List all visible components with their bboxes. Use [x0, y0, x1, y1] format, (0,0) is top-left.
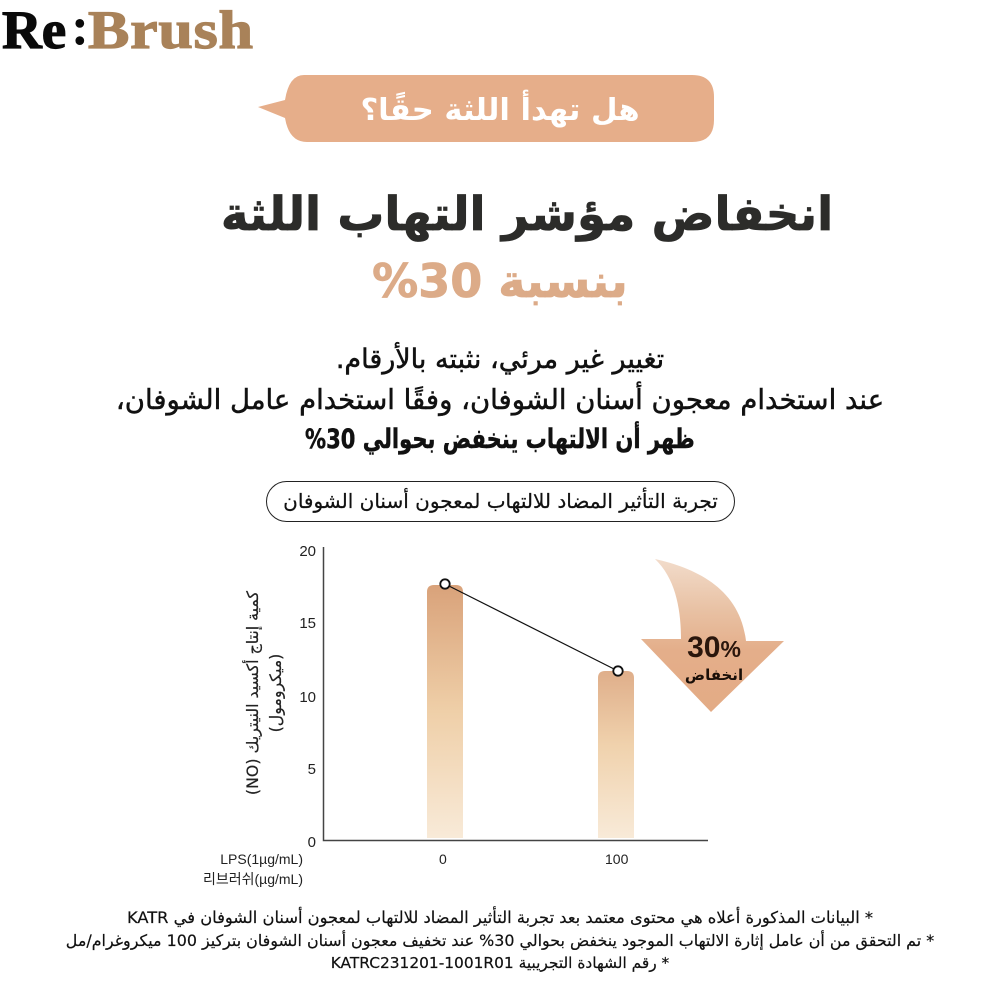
- footnotes: [66, 906, 934, 972]
- down arrow callout: 30%: [687, 631, 741, 664]
- logo: Brush: [88, 0, 254, 60]
- x axis labels: 0: [439, 851, 447, 867]
- body text: ظهر أن الالتهاب ينخفض بحوالي 30%: [305, 424, 695, 455]
- highlighted title: بنسبة 30%: [372, 254, 628, 308]
- y axis ticks: 0: [308, 834, 316, 851]
- footnotes: * رقم الشهادة التجريبية KATRC231201-1001R01: [331, 954, 669, 972]
- y axis ticks: 15: [299, 615, 316, 632]
- y axis title: [242, 590, 285, 795]
- y axis title: (ميكرومول): [266, 654, 285, 732]
- body text: تغيير غير مرئي، نثبته بالأرقام.: [336, 344, 664, 375]
- speech bubble heading: هل تهدأ اللثة حقًا؟: [360, 93, 640, 128]
- y axis ticks: 5: [308, 761, 316, 778]
- y axis ticks: 10: [299, 689, 316, 706]
- y axis title: كمية إنتاج أكسيد النيتريك (NO): [243, 591, 262, 795]
- logo: [2, 0, 254, 60]
- y axis ticks: [299, 543, 316, 851]
- main title: انخفاض مؤشر التهاب اللثة: [221, 188, 833, 242]
- x axis labels: 리브러쉬(µg/mL): [203, 871, 303, 887]
- chart title pill: [266, 481, 735, 522]
- down arrow callout: [641, 559, 784, 712]
- chart title pill: تجربة التأثير المضاد للالتهاب لمعجون أسنان الشوفان: [283, 489, 718, 513]
- body text: [116, 342, 884, 455]
- x axis labels: LPS(1µg/mL): [220, 851, 303, 867]
- x axis labels: 100: [605, 851, 628, 867]
- speech bubble heading: [258, 75, 714, 142]
- y axis ticks: 20: [299, 543, 316, 560]
- down arrow callout: انخفاض: [685, 666, 743, 684]
- footnotes: * تم التحقق من أن عامل إثارة الالتهاب الموجود ينخفض بحوالي 30% عند تخفيف معجون أسنان الشوفان بتركيز 100 ميكروغرام/مل: [66, 931, 934, 950]
- x axis labels: [203, 851, 628, 887]
- logo: Re: [2, 0, 66, 60]
- body text: عند استخدام معجون أسنان الشوفان، وفقًا استخدام عامل الشوفان،: [116, 384, 884, 416]
- footnotes: * البيانات المذكورة أعلاه هي محتوى معتمد بعد تجربة التأثير المضاد للالتهاب لمعجون أسنان الشوفان في KATR: [127, 908, 873, 927]
